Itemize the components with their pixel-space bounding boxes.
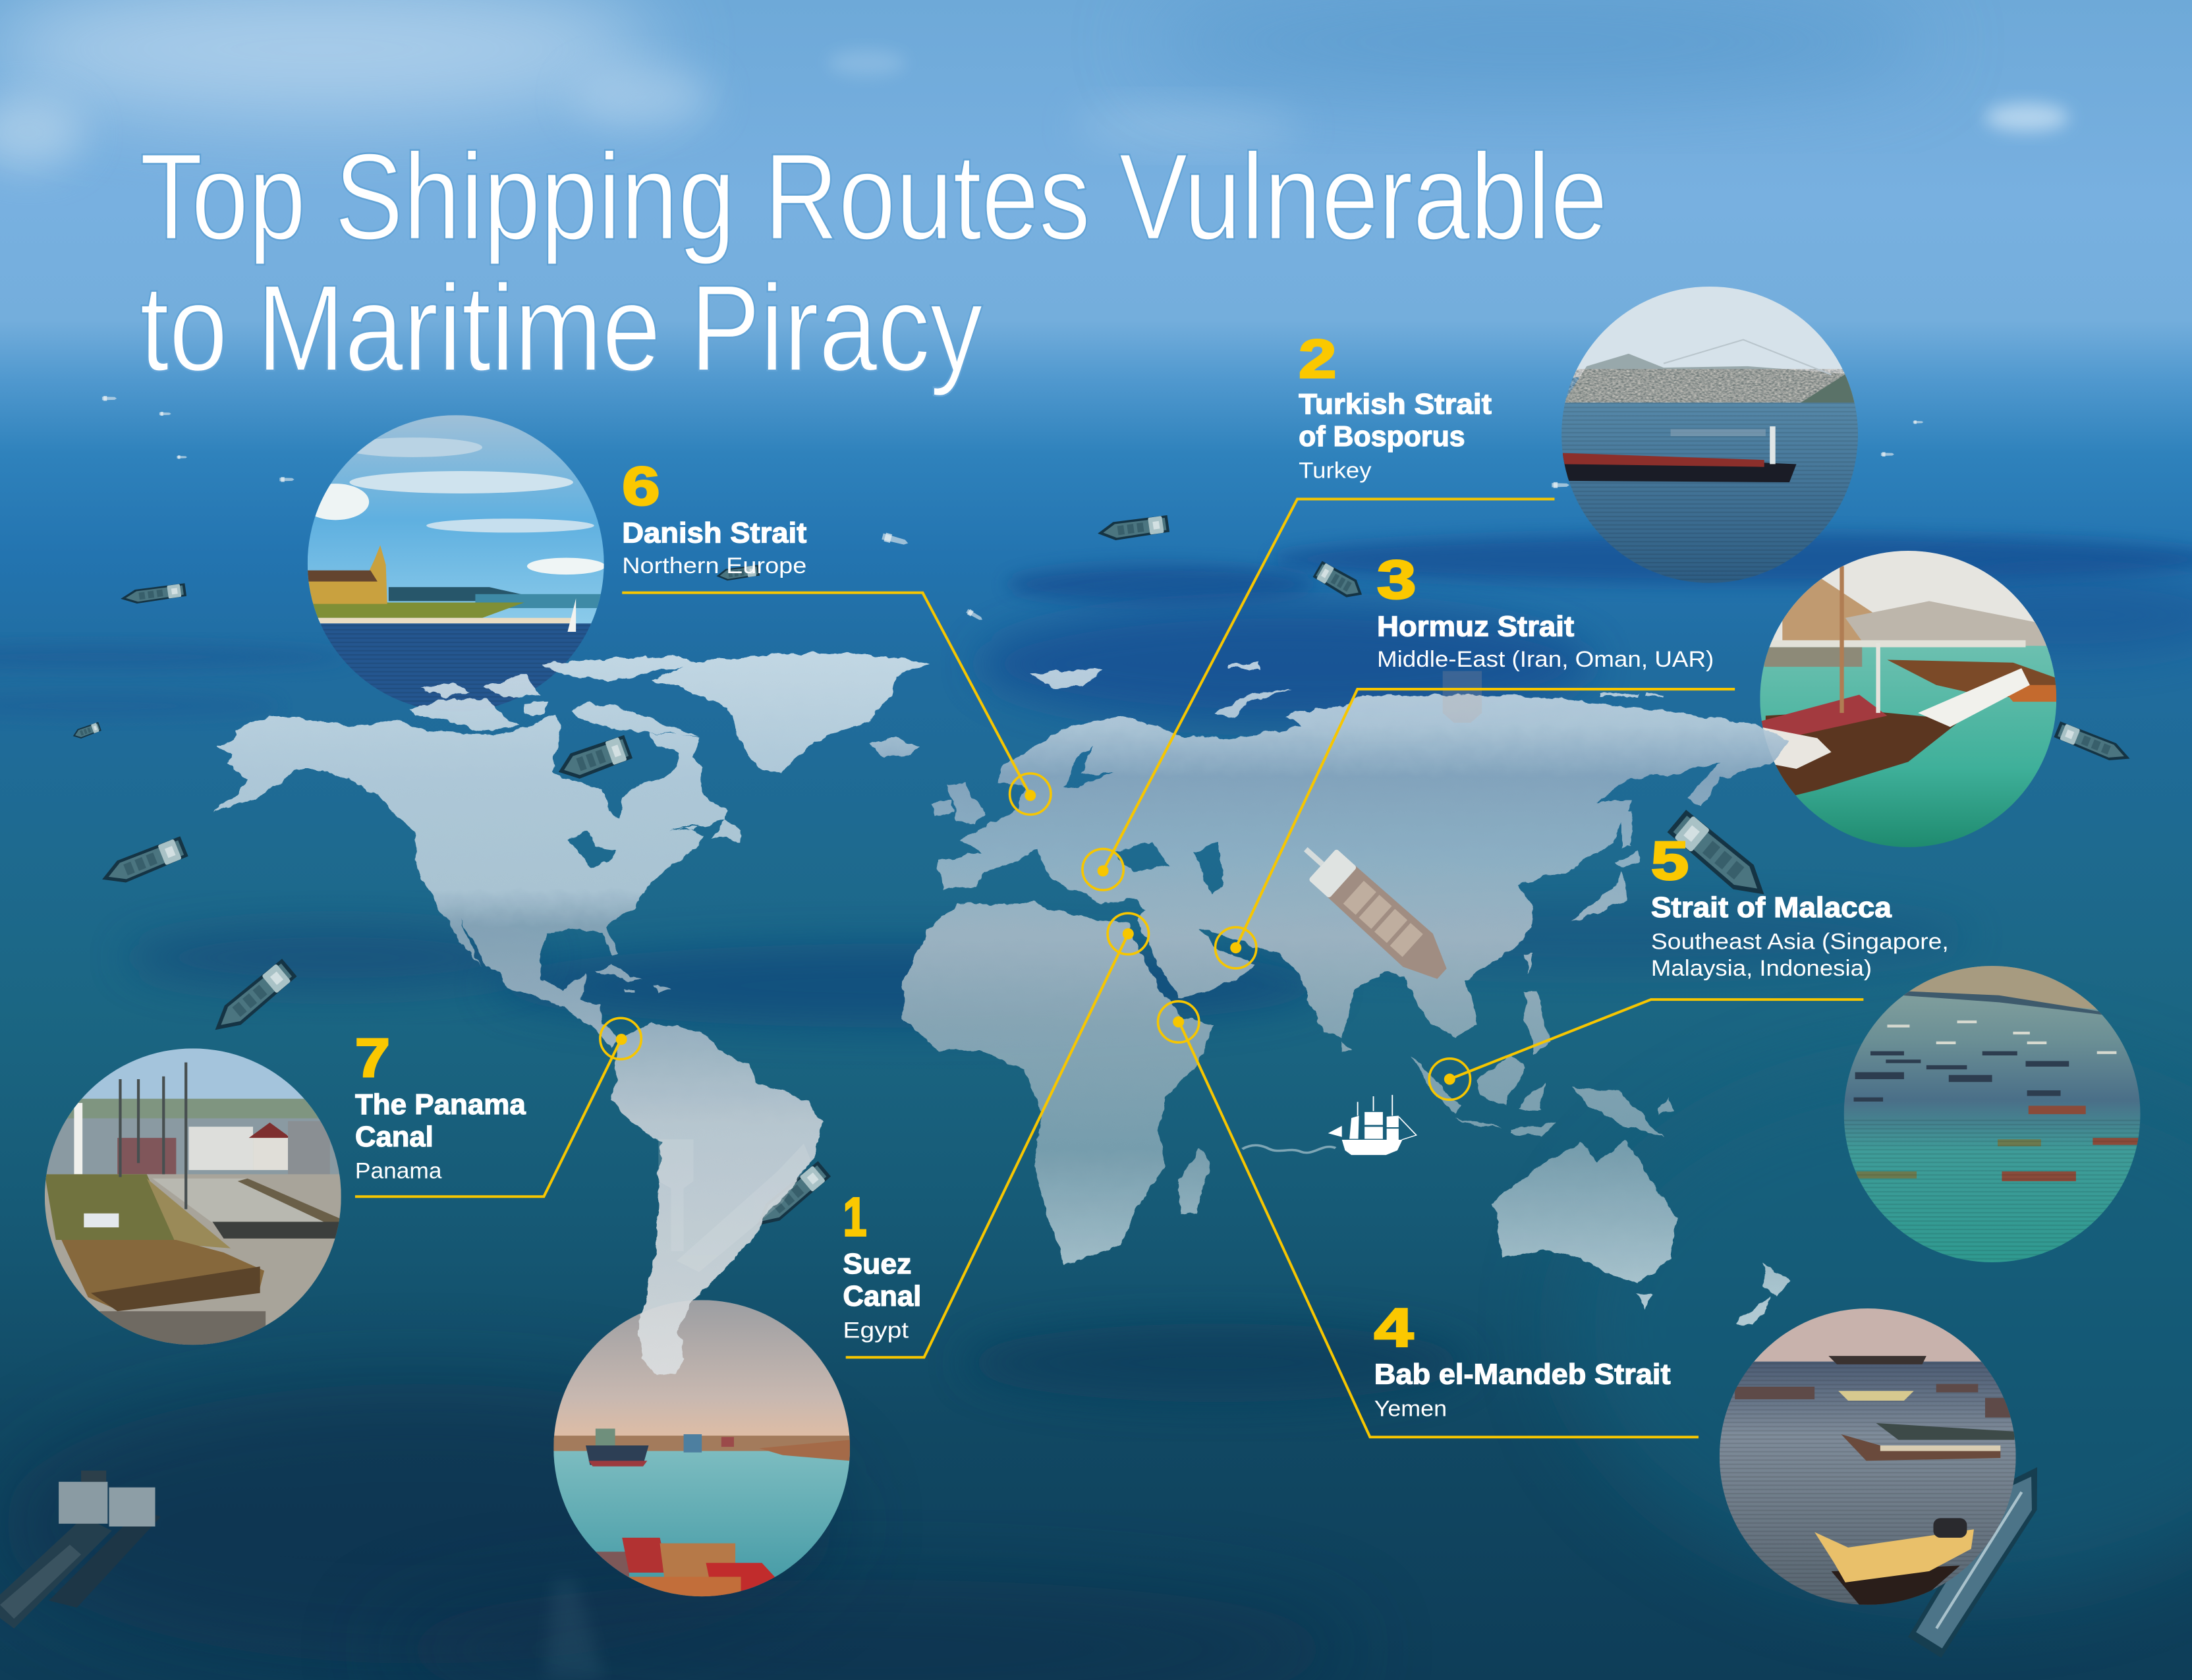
- callout line 4: [1179, 1021, 1699, 1437]
- Newfoundland: [711, 819, 741, 842]
- Caribbean islands: [595, 964, 670, 992]
- label 7 Panama Canal: Panama: [355, 1159, 442, 1184]
- Eurasia: [938, 695, 1789, 1040]
- label 3 Hormuz Strait: Hormuz Strait: [1377, 611, 1574, 642]
- sails and hull: [1328, 1112, 1403, 1155]
- panel: photo 7 Panama Canal: [45, 1048, 341, 1349]
- map: Europe, Asia, Africa, Oceania: [869, 663, 1789, 1326]
- British Isles: [932, 783, 986, 825]
- North America: [213, 714, 727, 1048]
- ghost ships over South America and Russia: [658, 671, 1482, 1272]
- label 1 Suez Canal: Suez: [843, 1248, 911, 1280]
- label 3 Hormuz Strait: [1377, 549, 1714, 672]
- Iceland and Svalbard: [869, 663, 1260, 758]
- Southeast Asia islands: [1411, 991, 1673, 1136]
- label 7 Panama Canal: The Panama: [355, 1089, 526, 1121]
- Japan: [1525, 806, 1638, 972]
- world map: [213, 653, 1789, 1378]
- label 5 Strait of Malacca: Malaysia, Indonesia): [1651, 956, 1872, 981]
- Tasmania and New Zealand: [1637, 1264, 1789, 1326]
- label 4 Bab el-Mandeb Strait: Yemen: [1374, 1396, 1447, 1421]
- label 5 Strait of Malacca: Southeast Asia (Singapore,: [1651, 930, 1949, 955]
- label 6 Danish Strait: [622, 455, 806, 578]
- label 2 Turkish Strait: of Bosporus: [1299, 421, 1465, 453]
- label 6 Danish Strait: Danish Strait: [622, 517, 806, 549]
- label 2 Turkish Strait: 2: [1299, 328, 1336, 389]
- large dark ships bottom left: [0, 1470, 161, 1629]
- callout line 1: [846, 934, 1128, 1357]
- label 2 Turkish Strait: [1299, 328, 1492, 484]
- label 5 Strait of Malacca: Strait of Malacca: [1651, 892, 1892, 924]
- panel: photo 2 Turkish Strait: [1561, 287, 1858, 584]
- title: [140, 128, 1608, 397]
- label 1 Suez Canal: Egypt: [843, 1318, 909, 1343]
- label 1 Suez Canal: Canal: [843, 1281, 921, 1312]
- title: Top Shipping Routes Vulnerable: [140, 128, 1608, 266]
- South America: [613, 1023, 823, 1378]
- Australia: [1493, 1141, 1676, 1285]
- map: Americas and Greenland: [213, 653, 930, 1378]
- background ships: [0, 515, 2133, 1659]
- Greenland: [651, 653, 930, 773]
- label 4 Bab el-Mandeb Strait: Bab el-Mandeb Strait: [1374, 1359, 1671, 1391]
- label 6 Danish Strait: Northern Europe: [622, 553, 806, 578]
- label 2 Turkish Strait: Turkish Strait: [1299, 389, 1492, 420]
- tanker bottom right: [1905, 1455, 2056, 1659]
- label 5 Strait of Malacca: 5: [1651, 830, 1689, 891]
- wave trail: [1243, 1145, 1335, 1153]
- callout line 2: [1103, 499, 1554, 871]
- label 1 Suez Canal: [843, 1187, 921, 1343]
- Africa: [904, 903, 1213, 1264]
- label 2 Turkish Strait: Turkey: [1299, 459, 1372, 484]
- label 3 Hormuz Strait: Middle-East (Iran, Oman, UAR): [1377, 647, 1714, 672]
- label 1 Suez Canal: 1: [843, 1187, 867, 1248]
- location markers: [600, 773, 1471, 1100]
- panel: photo 6 Danish Strait: [302, 415, 605, 713]
- Novaya Zemlya and Arctic Russia: [1216, 687, 1664, 737]
- panel: photo 3 Hormuz Strait: [1760, 551, 2056, 849]
- label 3 Hormuz Strait: 3: [1377, 549, 1416, 610]
- label 4 Bab el-Mandeb Strait: [1374, 1297, 1671, 1421]
- panel: photo 1 Suez Canal: [553, 1300, 850, 1602]
- callout line 5: [1449, 999, 1863, 1079]
- icon: pirate ship: [1243, 1095, 1417, 1155]
- callout line 6: [622, 593, 1030, 795]
- label 5 Strait of Malacca: [1651, 830, 1949, 981]
- callout line 3: [1236, 689, 1735, 948]
- label 7 Panama Canal: [355, 1027, 526, 1184]
- Arctic islands: [410, 656, 700, 739]
- panel: photo 4 Bab el-Mandeb Strait: [1720, 1308, 2020, 1608]
- label 7 Panama Canal: Canal: [355, 1121, 434, 1153]
- callout line 7: [355, 1040, 621, 1196]
- small distant ships on horizon: [102, 396, 1923, 622]
- Madagascar and Sri Lanka: [1178, 1040, 1351, 1215]
- label 7 Panama Canal: 7: [355, 1027, 390, 1088]
- label 4 Bab el-Mandeb Strait: 4: [1374, 1297, 1413, 1358]
- label 6 Danish Strait: 6: [622, 455, 660, 517]
- panel: photo 5 Strait of Malacca: [1844, 966, 2140, 1264]
- ghost ship over Asia: [1291, 833, 1458, 990]
- title: to Maritime Piracy: [140, 259, 983, 397]
